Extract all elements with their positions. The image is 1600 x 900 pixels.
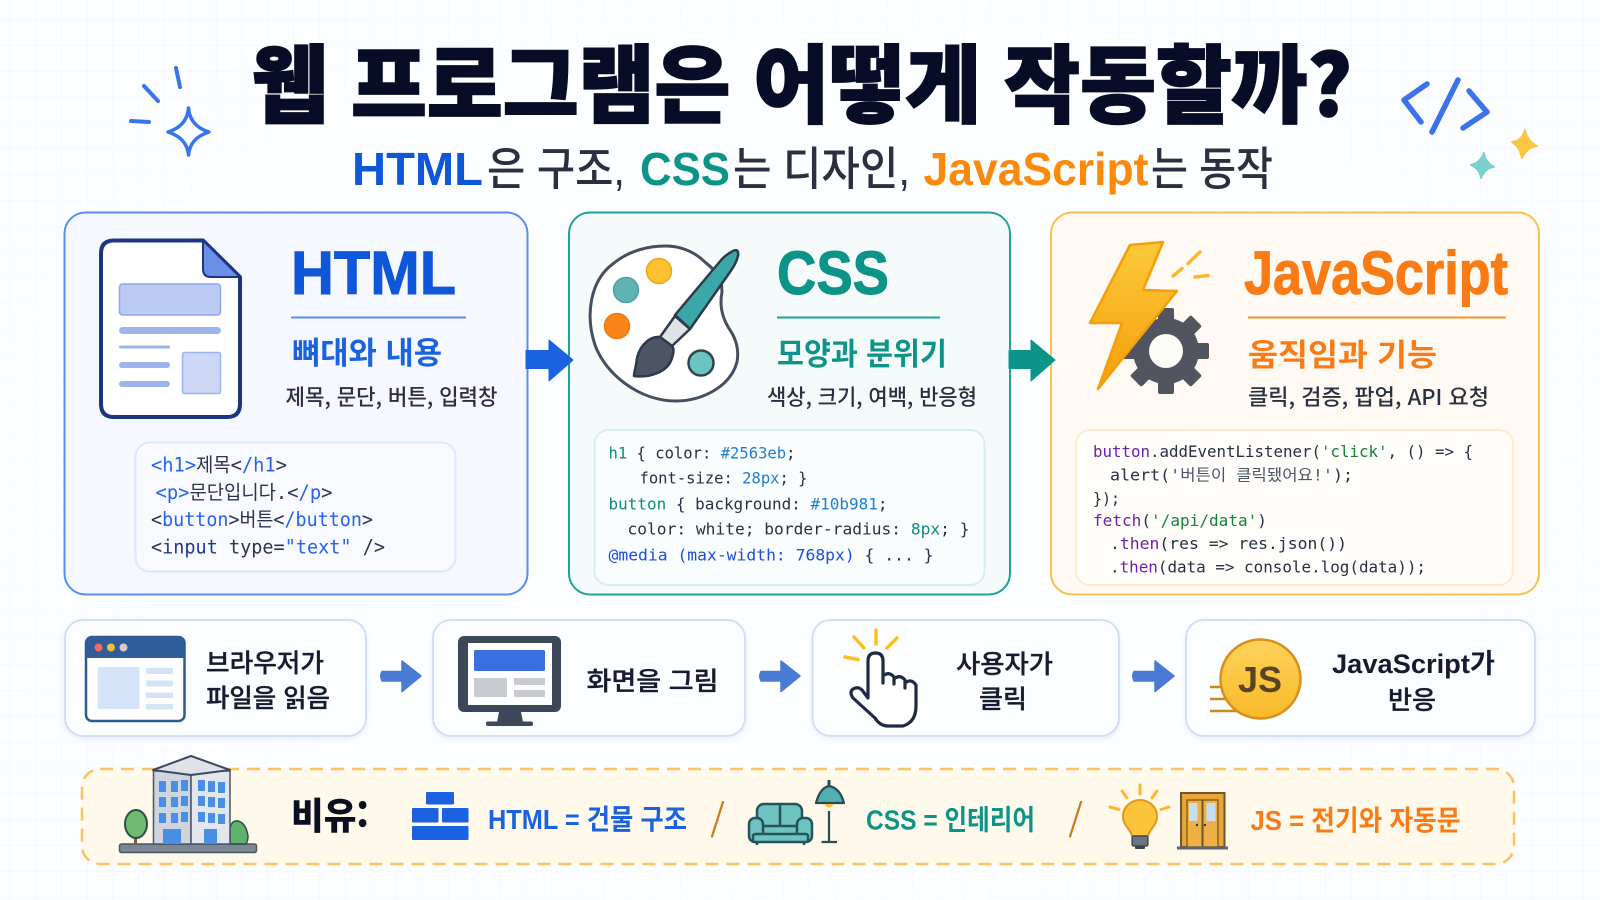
text: JS analogy: JS = 전기와 자동문 [1250,805,1460,836]
flow step 2: draws screen [433,620,745,736]
code block: javascript: alert('버튼이 클릭됐어요!' ); [1110,466,1353,484]
icon: monitor [458,636,561,726]
code block: html: <input type="text" /> [151,536,385,558]
subtitle: 는 디자인, [733,143,910,195]
flow step 3: user clicks [812,620,1119,736]
heading: CSS: CSS [777,239,889,307]
text: step 4: 반응 [1388,680,1436,717]
icon: building [120,756,256,852]
icon: sparkle with rays [131,68,209,155]
text: step 1 [206,643,330,715]
arrow: step 2 to 3 [760,661,800,692]
arrow: step 1 to 2 [381,661,421,692]
subtitle [352,143,1273,195]
text: javascript items: 클릭, 검증, 팝업, API 요청 [1248,380,1489,412]
divider slash [712,802,723,836]
code block: javascript: .then(res => res.json()) [1110,534,1347,553]
code block: javascript: .then(data => console.log(data)); [1110,558,1426,576]
icon: code brackets [1404,80,1487,132]
flow step 4: JavaScript reacts [1186,620,1535,736]
subtitle: 은 구조, [487,143,625,195]
text: css items: 색상, 크기, 여백, 반응형 [767,380,977,412]
icon: gold star [1512,130,1537,158]
code block: html [136,442,456,572]
text: step 3: 클릭 [979,679,1027,716]
code block: css: @media (max-width: 768px) { ... } [608,546,934,564]
code block: javascript: fetch('/api/data') [1093,511,1267,530]
heading: JavaScript: JavaScript [1244,239,1508,307]
subheading: 모양과 분위기: 모양과 분위기 [777,329,947,374]
icon: floor lamp [816,780,844,842]
subtitle: 는 동작 [1151,143,1273,195]
text: CSS analogy: CSS = 인테리어 [866,804,1035,836]
label: 비유: 비유: [291,786,369,840]
subtitle: CSS [640,143,730,195]
code block: html: <button>버튼</button> [151,508,373,531]
icon: palette and brush [590,246,738,401]
code block: javascript: button.addEventListener('click', () => { [1093,442,1473,461]
arrow: step 3 to 4 [1133,661,1174,692]
icon: browser window [86,637,184,721]
icon: door [1177,793,1228,850]
icon: light bulb [1110,785,1169,849]
icon: JS coin [1210,640,1300,718]
icon: teal star [1471,153,1494,178]
subheading: 뼈대와 내용: 뼈대와 내용 [292,328,442,373]
subtitle: JavaScript [924,143,1148,195]
panel: HTML [64,212,528,594]
flow step 1: browser reads file [65,620,366,736]
code block: css [594,430,984,585]
text: step 2: 화면을 그림 [586,661,718,698]
panel: CSS [569,212,1010,594]
text: step 1: 브라우저가 [206,643,324,680]
code block: css: button { background: #10b981; [608,494,888,514]
icon: sofa [749,804,812,845]
text: step 3 [956,644,1053,716]
text: step 4: JavaScript가 [1332,649,1495,679]
code block: css: h1 { color: #2563eb; [608,444,796,462]
icon: bricks [412,792,468,840]
code block: css: color: white; border-radius: 8px; } [628,520,970,538]
icon: lightning and gear [1090,242,1209,394]
icon: clicking hand [845,630,916,726]
arrow: HTML to CSS [526,340,573,381]
code block: html: <p>문단입니다.</p> [156,481,332,504]
code block: javascript [1076,430,1513,585]
title: 웹 프로그램은 어떻게 작동할까? [252,18,1352,141]
heading: HTML: HTML [291,239,456,307]
code block: css: font-size: 28px; } [640,468,808,488]
code block: html: <h1>제목</h1> [151,454,287,476]
subheading: 움직임과 기능: 움직임과 기능 [1248,330,1437,375]
arrow: CSS to JavaScript [1009,340,1055,381]
panel: JavaScript [1051,212,1539,594]
text: step 1: 파일을 읽음 [206,678,330,715]
panel: analogy banner [82,756,1514,864]
icon: document [101,240,240,417]
text: step 3: 사용자가 [956,644,1053,681]
subtitle: HTML [352,143,483,195]
icon: JS coin: JS [1238,659,1282,700]
text: step 4 [1332,649,1495,717]
text: HTML analogy: HTML = 건물 구조 [488,804,687,835]
text: html items: 제목, 문단, 버튼, 입력창 [286,380,498,412]
divider slash [1070,802,1081,836]
code block: javascript: }); [1093,489,1120,508]
